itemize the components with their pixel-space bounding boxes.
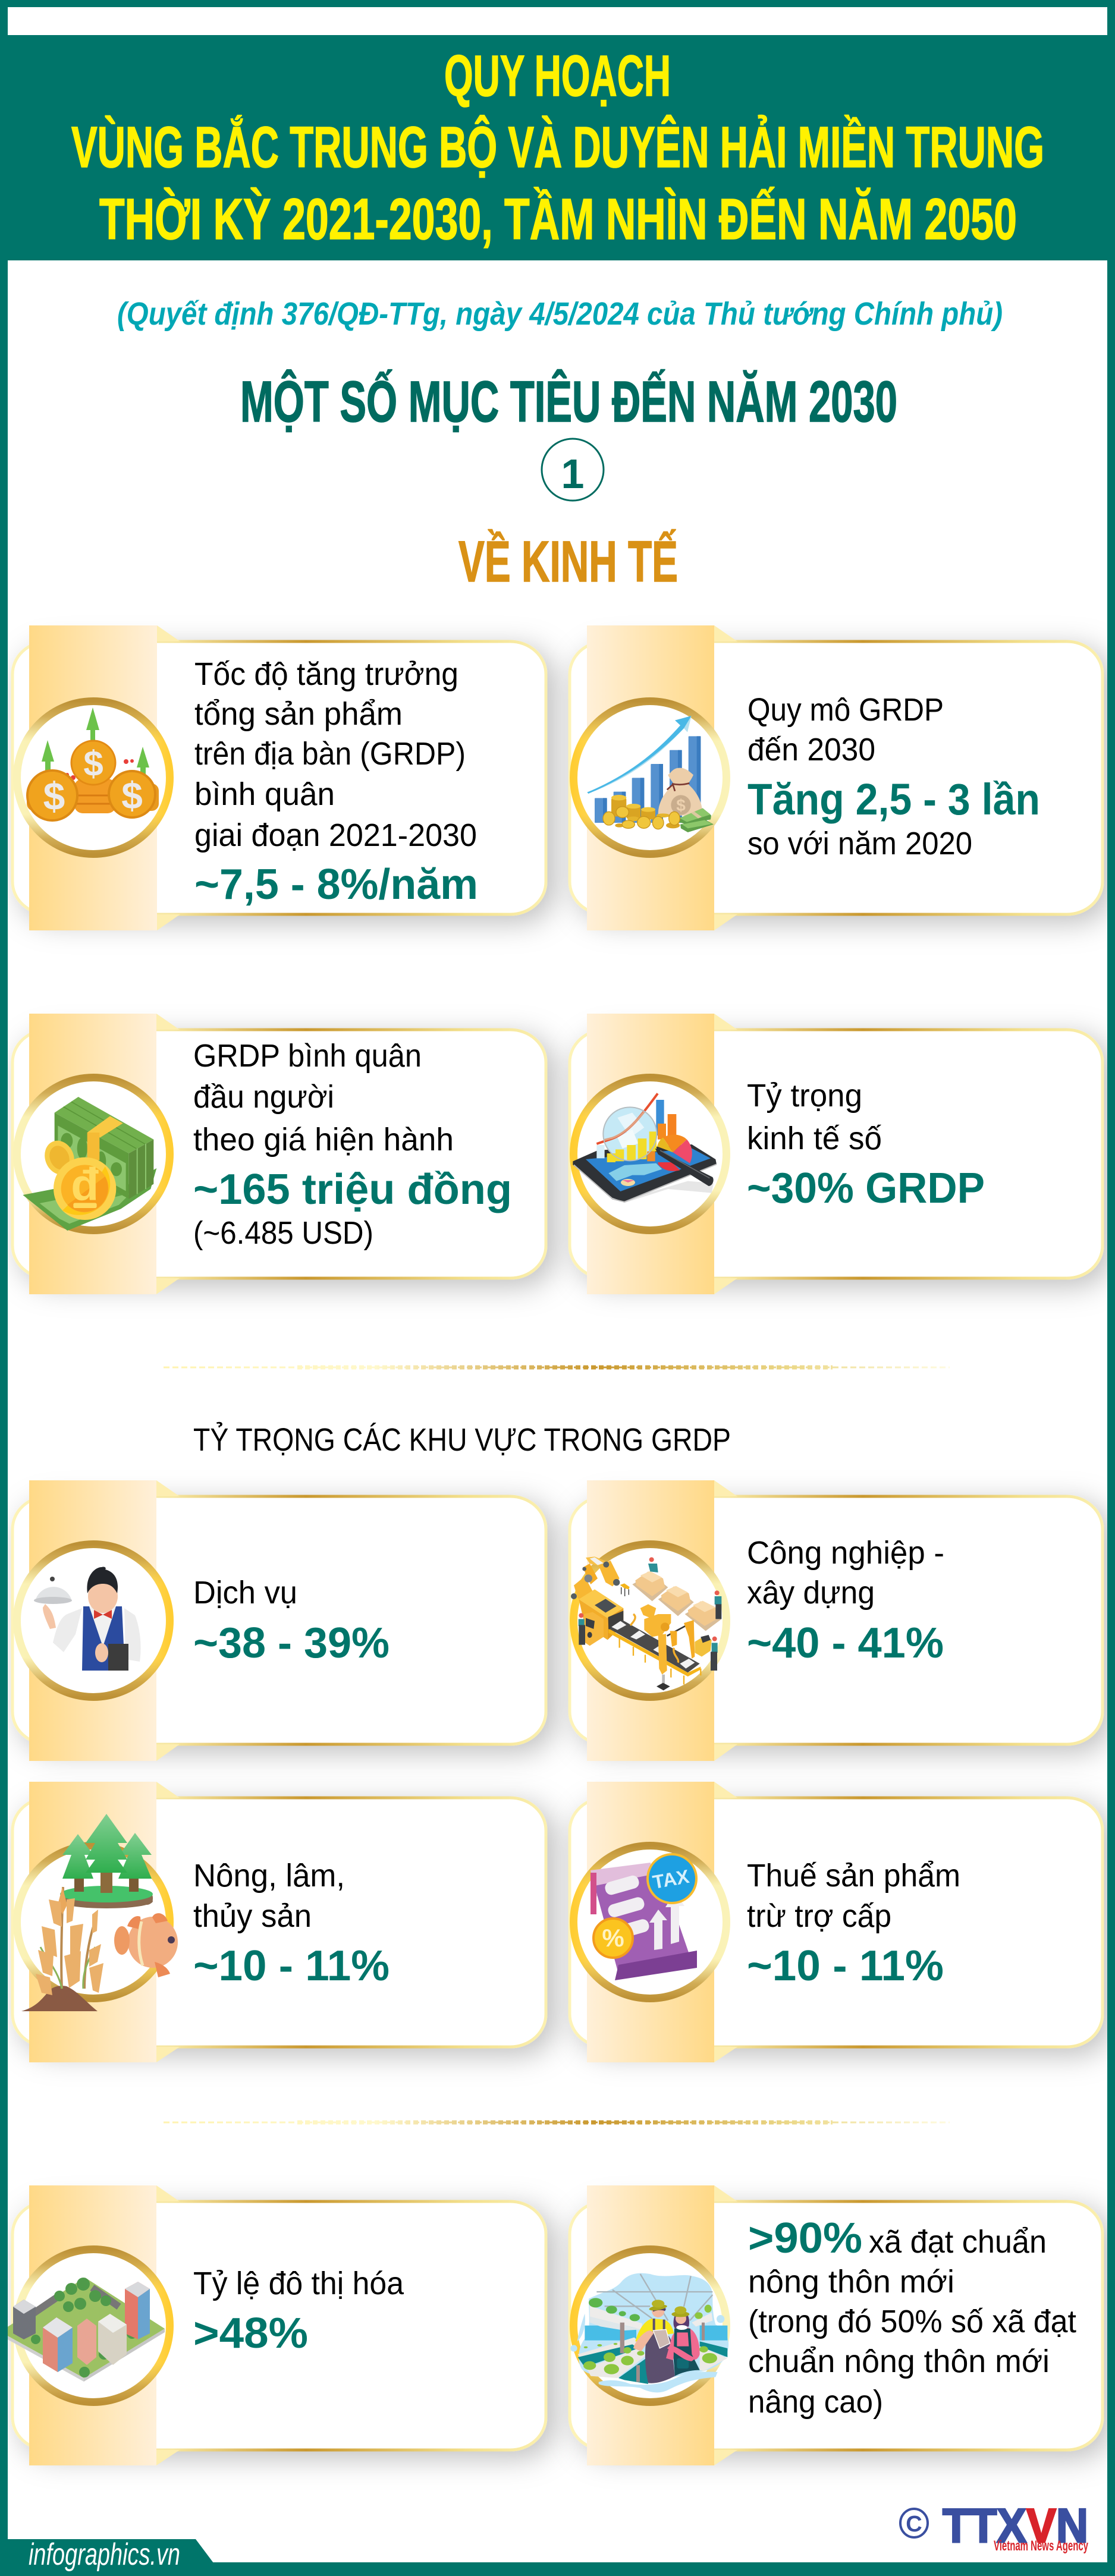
description: thủy sản	[193, 1898, 312, 1934]
icon: factory line	[571, 1556, 721, 1690]
description with value: xã đạt chuẩn	[869, 2224, 1047, 2260]
description: Tốc độ tăng trưởng	[194, 656, 458, 692]
subtitle: (Quyết định 376/QĐ-TTg, ngày 4/5/2024 của Thủ tướng Chính phủ)	[117, 296, 1003, 332]
panel: GRDP scale	[570, 625, 1103, 930]
description: Thuế sản phẩm	[747, 1858, 960, 1894]
icon: city block	[0, 2278, 165, 2382]
description	[193, 1038, 454, 1251]
description	[193, 1858, 345, 1934]
panel: product tax	[570, 1782, 1103, 2062]
description: Công nghiệp -	[747, 1535, 944, 1571]
description: tổng sản phẩm	[194, 696, 403, 732]
copyright mark: C	[906, 2512, 922, 2537]
number badge	[542, 439, 604, 501]
description: trừ trợ cấp	[747, 1898, 891, 1934]
description: đến 2030	[747, 732, 875, 768]
description with value	[748, 2215, 1076, 2420]
icon: coins with arrows: $	[43, 774, 65, 818]
copyright mark	[900, 2509, 928, 2537]
category heading: VỀ KINH TẾ	[458, 529, 678, 594]
description: theo giá hiện hành	[193, 1122, 454, 1158]
number badge: 1	[561, 451, 584, 497]
icon: tablet with charts	[573, 1093, 717, 1203]
value: ~10 - 11%	[747, 1942, 944, 1990]
description: xây dựng	[747, 1575, 875, 1611]
description with value: (trong đó 50% số xã đạt	[748, 2304, 1076, 2339]
icon: tax scroll: TAX	[651, 1866, 691, 1893]
description	[747, 692, 972, 861]
description: GRDP bình quân	[193, 1038, 422, 1074]
icon: banknotes and coin	[23, 1097, 156, 1231]
panel: industry	[570, 1480, 1103, 1761]
icon: coins with arrows	[27, 707, 159, 820]
description: bình quân	[194, 776, 335, 812]
description: trên địa bàn (GRDP)	[194, 736, 466, 772]
description	[747, 1858, 960, 1934]
description: đầu người	[193, 1079, 334, 1115]
icon: tax scroll: %	[602, 1924, 624, 1952]
value: ~7,5 - 8%/năm	[194, 861, 478, 908]
panel: new rural communes	[570, 2185, 1103, 2465]
panel: growth rate	[12, 625, 546, 930]
title line 1: QUY HOẠCH	[444, 43, 671, 108]
description: (~6.485 USD)	[193, 1215, 373, 1251]
panel: digital economy	[570, 1014, 1103, 1294]
value: ~165 triệu đồng	[193, 1166, 512, 1213]
value: ~30% GRDP	[747, 1165, 985, 1212]
description with value: >90%	[748, 2215, 862, 2262]
value: Tăng 2,5 - 3 lần	[747, 775, 1040, 824]
description: kinh tế số	[747, 1121, 882, 1156]
description with value: nông thôn mới	[748, 2264, 954, 2300]
description: Dịch vụ	[193, 1575, 297, 1611]
icon: growth chart and money: $	[676, 796, 686, 814]
icon: tax scroll	[591, 1854, 697, 1980]
value: >48%	[193, 2310, 308, 2357]
description with value: nâng cao)	[748, 2384, 883, 2420]
description: so với năm 2020	[747, 826, 972, 861]
icon: coins with arrows: $	[83, 744, 103, 784]
icon: banknotes and coin: đ	[71, 1159, 99, 1210]
value: ~40 - 41%	[747, 1619, 944, 1667]
panel: urbanisation	[0, 2185, 546, 2465]
icon: waiter	[34, 1567, 141, 1671]
sector heading: TỶ TRỌNG CÁC KHU VỰC TRONG GRDP	[193, 1422, 731, 1458]
description	[747, 1078, 882, 1156]
icon: coins with arrows: $	[121, 774, 143, 817]
description: Tỷ trọng	[747, 1078, 862, 1114]
description	[194, 656, 477, 853]
panel: GRDP per capita	[12, 1014, 546, 1294]
value: ~38 - 39%	[193, 1619, 390, 1667]
panel: agriculture	[12, 1782, 546, 2062]
description: Quy mô GRDP	[747, 692, 944, 728]
icon: growth chart and money	[587, 716, 714, 832]
description: Tỷ lệ đô thị hóa	[193, 2266, 404, 2301]
description	[747, 1535, 944, 1611]
source site: infographics.vn	[29, 2537, 180, 2572]
footer tab	[0, 2537, 213, 2576]
wordmark: TTXVN	[943, 2499, 1088, 2553]
agency logo	[900, 2499, 1088, 2554]
panel: services	[12, 1480, 546, 1761]
value: ~10 - 11%	[193, 1942, 390, 1990]
icon: forest, rice and fish	[21, 1814, 178, 2011]
description with value: chuẩn nông thôn mới	[748, 2344, 1050, 2379]
description: giai đoạn 2021-2030	[194, 817, 477, 853]
description: Nông, lâm,	[193, 1858, 345, 1894]
header band	[0, 35, 1115, 260]
icon: farmers in greenhouse	[570, 2273, 728, 2392]
